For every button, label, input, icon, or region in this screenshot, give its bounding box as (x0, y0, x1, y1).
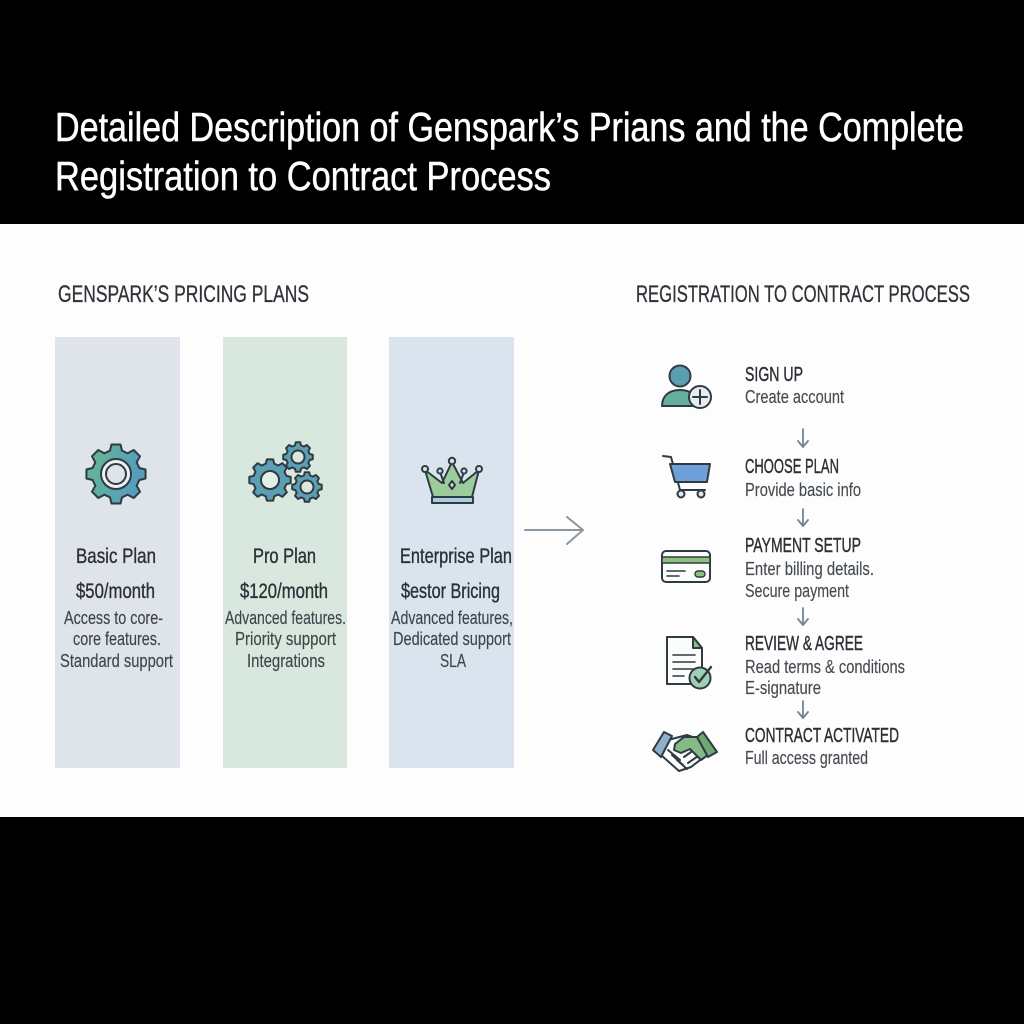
step text: Enter billing details. (745, 559, 874, 579)
plan price: $120/month (240, 580, 328, 603)
step: contract activated (653, 725, 899, 771)
step: choose plan (663, 456, 861, 500)
plan name: Pro Plan (253, 545, 316, 568)
plan price: $estor Bricing (401, 580, 500, 603)
step text (745, 633, 905, 698)
plan price: $50/month (76, 580, 155, 603)
step: sign up (662, 364, 844, 408)
plan features: Dedicated support (393, 629, 511, 649)
icon: gear (86, 444, 146, 504)
step text: E-signature (745, 678, 821, 698)
plan features: Advanced features, (391, 608, 513, 628)
plan features (391, 608, 513, 671)
icon: three gears (249, 442, 322, 502)
step text: Provide basic info (745, 480, 861, 500)
plan features: Standard support (60, 651, 173, 671)
step text: CHOOSE PLAN (745, 456, 839, 478)
plan features: Access to core- (64, 608, 163, 628)
step text: CONTRACT ACTIVATED (745, 725, 899, 747)
icon: shopping cart (663, 456, 710, 498)
step text: Create account (745, 387, 844, 407)
step text: PAYMENT SETUP (745, 535, 861, 557)
icon: credit card (662, 551, 710, 582)
arrow: step 2 to 3 (798, 509, 808, 526)
heading: pricing plans: GENSPARK’S PRICING PLANS (58, 281, 309, 308)
panel: basic plan (55, 337, 180, 768)
arrow: step 4 to 5 (798, 701, 808, 718)
step text (745, 456, 861, 500)
plan features: SLA (440, 651, 466, 671)
plan features: core features. (73, 629, 161, 649)
arrow: plans to process (525, 517, 583, 544)
icon: document with check (667, 637, 711, 688)
plan features: Integrations (247, 651, 325, 671)
icon: crown (422, 458, 482, 503)
plan features (225, 608, 346, 671)
step: payment setup (662, 535, 874, 601)
plan features: Advanced features. (225, 608, 346, 628)
icon: handshake (653, 732, 717, 771)
step text: SIGN UP (745, 364, 803, 386)
panel: enterprise plan (389, 337, 514, 768)
step text: REVIEW & AGREE (745, 633, 863, 655)
plan name: Basic Plan (76, 545, 156, 568)
step text (745, 725, 899, 768)
content panel (0, 224, 1024, 817)
step text (745, 535, 874, 601)
icon: user plus (662, 366, 711, 408)
arrow: step 1 to 2 (798, 429, 808, 447)
arrow: step 3 to 4 (798, 608, 808, 625)
plan features (60, 608, 173, 671)
plan name: Enterprise Plan (400, 545, 512, 568)
step: review and agree (667, 633, 905, 698)
title (55, 104, 964, 199)
step text: Full access granted (745, 748, 868, 768)
title: Registration to Contract Process (55, 153, 551, 199)
panel: pro plan (223, 337, 347, 768)
step text: Secure payment (745, 581, 849, 601)
plan features: Priority support (235, 629, 336, 649)
step text: Read terms & conditions (745, 657, 905, 677)
step text (745, 364, 844, 407)
